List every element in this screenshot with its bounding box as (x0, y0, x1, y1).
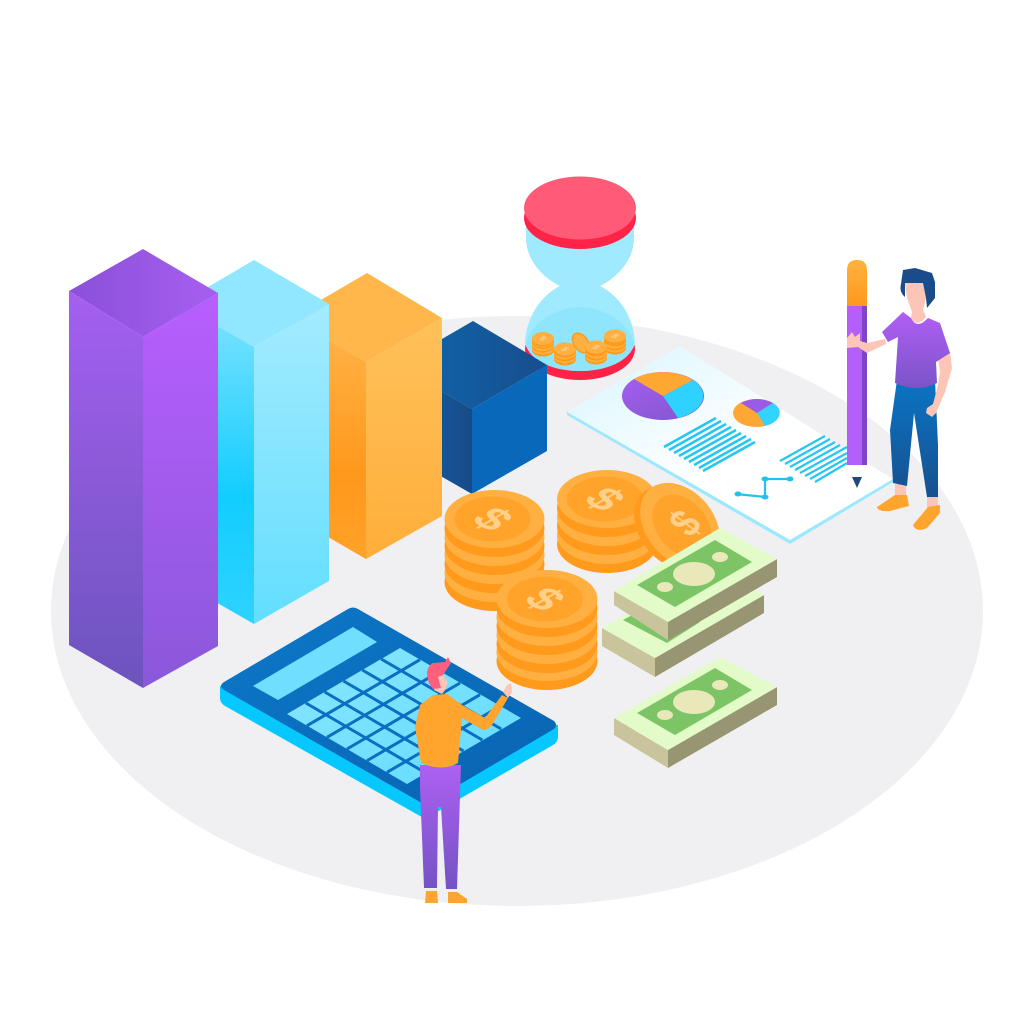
person shirt and arm (415, 694, 508, 768)
coin stack: left (444, 490, 544, 611)
line chart (734, 476, 794, 500)
hourglass coins: $ (589, 343, 603, 351)
person shoes (425, 891, 467, 903)
back arm and hand (847, 332, 886, 353)
jeans (890, 380, 938, 497)
coin stack: back: $ (573, 481, 636, 518)
banknote stack: top (614, 528, 777, 640)
calculator keypad (287, 648, 521, 784)
hourglass (524, 176, 636, 380)
tilted coin (618, 467, 736, 586)
calculator screen (253, 627, 377, 700)
bar: light blue (179, 260, 329, 624)
text lines block one (664, 418, 755, 471)
bar: dark blue cube (397, 321, 547, 494)
banknote stack: front (614, 657, 777, 768)
pencil tip (852, 477, 862, 488)
text lines block two (780, 436, 847, 482)
calculator (220, 608, 558, 818)
coin stack: front: $ (513, 581, 576, 618)
coin stack: left: $ (461, 501, 524, 538)
person hair (427, 657, 451, 689)
calculator side (220, 686, 558, 818)
calculator top (221, 608, 556, 804)
front arm and hand (926, 352, 952, 417)
pencil body (847, 306, 867, 465)
hourglass coins: $ (558, 345, 572, 353)
coin stack: front (496, 570, 598, 690)
bar: purple (69, 249, 218, 688)
small pie chart (733, 399, 780, 427)
person legs (420, 765, 461, 889)
person face (434, 675, 448, 694)
hourglass coins: $ (608, 332, 622, 340)
hourglass coins: $ (536, 335, 550, 342)
banknote stack: middle (602, 565, 764, 677)
bar: orange (290, 273, 442, 559)
neck and face (905, 283, 926, 323)
person: right with purple shirt (847, 268, 952, 530)
large pie chart (622, 372, 704, 420)
hourglass base (525, 318, 635, 380)
hourglass sand dome (526, 307, 634, 371)
pencil eraser (847, 260, 867, 306)
person: bottom with orange shirt (415, 657, 512, 903)
hourglass top cap (524, 176, 636, 249)
paper sheet (567, 346, 893, 544)
coin stack: back (557, 470, 657, 573)
person hand (503, 683, 512, 698)
hourglass coins (532, 330, 626, 366)
shoes (877, 495, 940, 530)
document with charts (567, 346, 893, 544)
tilted coin: $ (659, 502, 712, 545)
background ellipse (51, 316, 983, 906)
pencil (847, 260, 867, 488)
hourglass glass (525, 210, 635, 371)
ankles (895, 484, 938, 509)
shirt (882, 312, 950, 388)
hair (900, 268, 935, 308)
